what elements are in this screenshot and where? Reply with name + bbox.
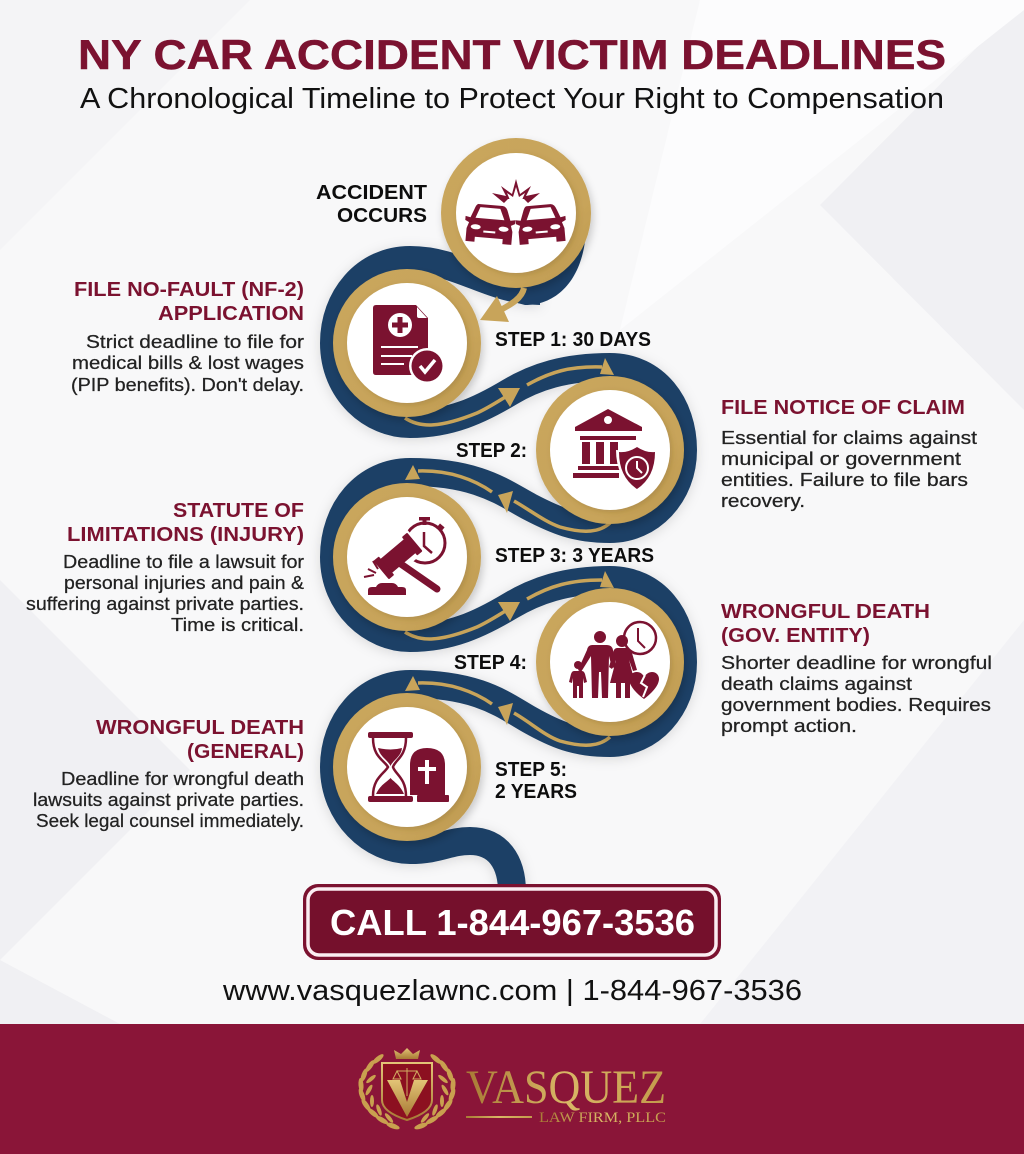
icon: medical document [373,305,445,384]
text: file no-fault: FILE NO-FAULT (NF-2) [74,278,304,301]
icon: car crash [463,179,568,245]
text: file no-fault: Strict deadline to file for [86,332,304,352]
text: file no-fault: medical bills & lost wages [72,353,304,373]
text: wrongful death general [33,716,304,831]
step 3 label: STEP 3: 3 YEARS [495,545,654,567]
arrow: accident to step 1 [480,288,524,322]
text: statute of limitations [26,499,304,635]
call button: CALL 1-844-967-3536 [330,902,695,943]
text: notice of claim: entities. Failure to file bars [721,470,968,490]
logo shield [382,1063,432,1120]
logo: LAW FIRM, PLLC [539,1110,666,1126]
text: statute of limitations: Time is critical. [171,615,304,635]
subtitle: A Chronological Timeline to Protect Your Right to Compensation [80,83,944,115]
footer band [0,1024,1024,1154]
text: wrongful death government: death claims against [721,674,912,694]
text: notice of claim: municipal or government [721,449,961,469]
text: statute of limitations: LIMITATIONS (INJURY) [67,523,304,546]
gold arrows on ribbon [405,358,614,745]
logo crown [394,1048,420,1059]
arrow: step 3 second segment [527,571,614,599]
icon: gavel and stopwatch [364,517,445,595]
node: no-fault application [333,269,481,417]
arrow: step 1 second segment [527,358,614,385]
step 5 label: 2 YEARS [495,781,577,803]
text: statute of limitations: STATUTE OF [173,499,304,522]
call button [303,884,721,960]
node: accident [441,138,591,288]
text: notice of claim [721,396,977,511]
accident label [316,182,427,227]
text: file no-fault [71,278,304,395]
step 1 label: STEP 1: 30 DAYS [495,329,651,351]
text: wrongful death general: (GENERAL) [187,740,304,763]
icon: family, clock and broken heart [569,622,659,699]
text: file no-fault: APPLICATION [158,302,304,325]
text: wrongful death general: Deadline for wrongful death [61,769,304,789]
arrow: step 1 first segment [405,388,520,425]
logo [357,1048,666,1131]
timeline ribbon [334,225,683,892]
text: wrongful death government [721,600,992,736]
arrow: step 3 first segment [405,602,520,639]
node: statute of limitations [333,483,481,631]
node: notice of claim [536,376,684,524]
text: notice of claim: FILE NOTICE OF CLAIM [721,396,965,419]
text: wrongful death government: (GOV. ENTITY) [721,624,870,647]
website and phone: www.vasquezlawnc.com | 1-844-967-3536 [222,975,802,1007]
icon: courthouse with shield [573,409,658,492]
logo V [387,1080,428,1117]
step 5 label: STEP 5: [495,759,567,781]
text: statute of limitations: suffering against private parties. [26,594,304,614]
icon: hourglass and tombstone [368,732,449,802]
text: wrongful death general: lawsuits against private parties. [33,790,304,810]
node: wrongful death general [333,693,481,841]
logo wordmark: VASQUEZ [466,1061,666,1114]
title: NY CAR ACCIDENT VICTIM DEADLINES [78,31,946,78]
navy crescent under first node [495,225,586,305]
text: statute of limitations: personal injuries and pain & [64,573,304,593]
text: wrongful death government: prompt action. [721,716,857,736]
step 5 label [495,759,577,803]
accident label: ACCIDENT [316,182,427,204]
step 2 label: STEP 2: [456,440,527,462]
logo laurels [357,1053,457,1131]
text: notice of claim: Essential for claims against [721,428,977,448]
text: wrongful death general: Seek legal counsel immediately. [36,811,304,831]
step 4 label: STEP 4: [454,652,527,674]
arrow: step 2 first segment [498,491,610,531]
text: wrongful death general: WRONGFUL DEATH [96,716,304,739]
node: wrongful death government [536,588,684,736]
arrow: step 2 second segment [405,465,492,492]
arrow: step 4 first segment [498,703,610,745]
text: statute of limitations: Deadline to file a lawsuit for [63,552,304,572]
navy path [334,260,683,892]
text: wrongful death government: Shorter deadline for wrongful [721,653,992,673]
arrow: step 4 second segment [405,676,492,704]
accident label: OCCURS [337,205,427,227]
text: wrongful death government: WRONGFUL DEATH [721,600,930,623]
text: wrongful death government: government bodies. Requires [721,695,991,715]
text: notice of claim: recovery. [721,491,805,511]
logo scales [393,1068,421,1096]
text: file no-fault: (PIP benefits). Don't delay. [71,375,304,395]
